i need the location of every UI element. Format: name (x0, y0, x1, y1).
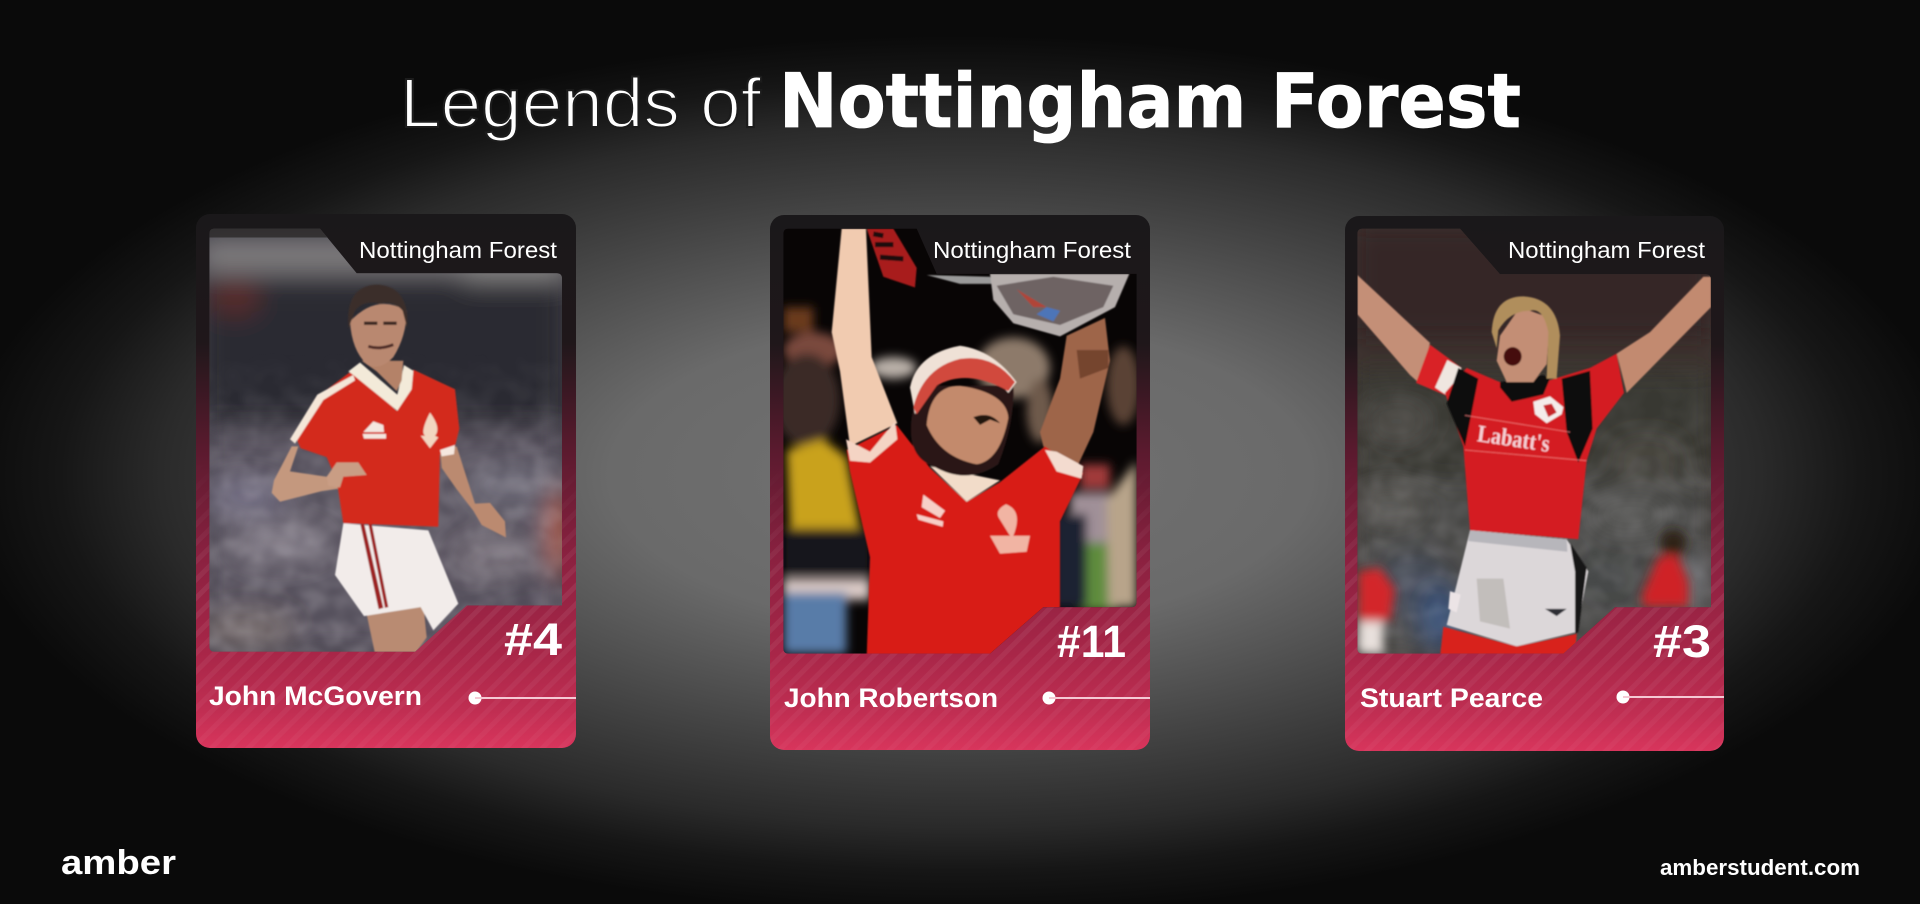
card 3 stripes (1345, 534, 1724, 718)
card 3 photo: Stuart Pearce: Labatt's (1476, 421, 1551, 458)
card 1 stripes (196, 532, 576, 716)
card 2 jersey number: #11 (1057, 616, 1126, 667)
card 2 tab label: Nottingham Forest (933, 237, 1132, 263)
card 1 jersey number: #4 (504, 614, 562, 665)
card 2 connector line (1042, 692, 1150, 704)
title: bold part: Nottingham Forest (779, 57, 1521, 145)
panel: Stuart Pearce card (1345, 216, 1724, 751)
card 2 stripes (770, 534, 1150, 718)
card 2 photo: John Robertson (773, 225, 1140, 657)
card 3 connector line (1616, 690, 1724, 704)
card 2 base (770, 215, 1150, 750)
card 3 base (1345, 216, 1724, 751)
panel: John Robertson card (770, 215, 1150, 750)
card 1 connector line (468, 692, 576, 704)
card 2 player name: John Robertson (784, 683, 998, 713)
card 3 tab label: Nottingham Forest (1508, 237, 1706, 263)
panel: John McGovern card (196, 214, 576, 748)
card 1 tab label: Nottingham Forest (359, 237, 558, 263)
card 1 player name: John McGovern (209, 681, 422, 711)
title (400, 57, 1521, 145)
card 1 photo: John McGovern (197, 225, 569, 657)
card 3 player name: Stuart Pearce (1360, 683, 1543, 713)
logo: amber: amber (61, 844, 176, 882)
card 3 photo: Stuart Pearce (1350, 221, 1717, 661)
website url: amberstudent.com (1660, 855, 1860, 880)
card 1 base (196, 214, 576, 748)
title: light part: Legends of (400, 64, 762, 142)
card 3 jersey number: #3 (1653, 616, 1711, 667)
